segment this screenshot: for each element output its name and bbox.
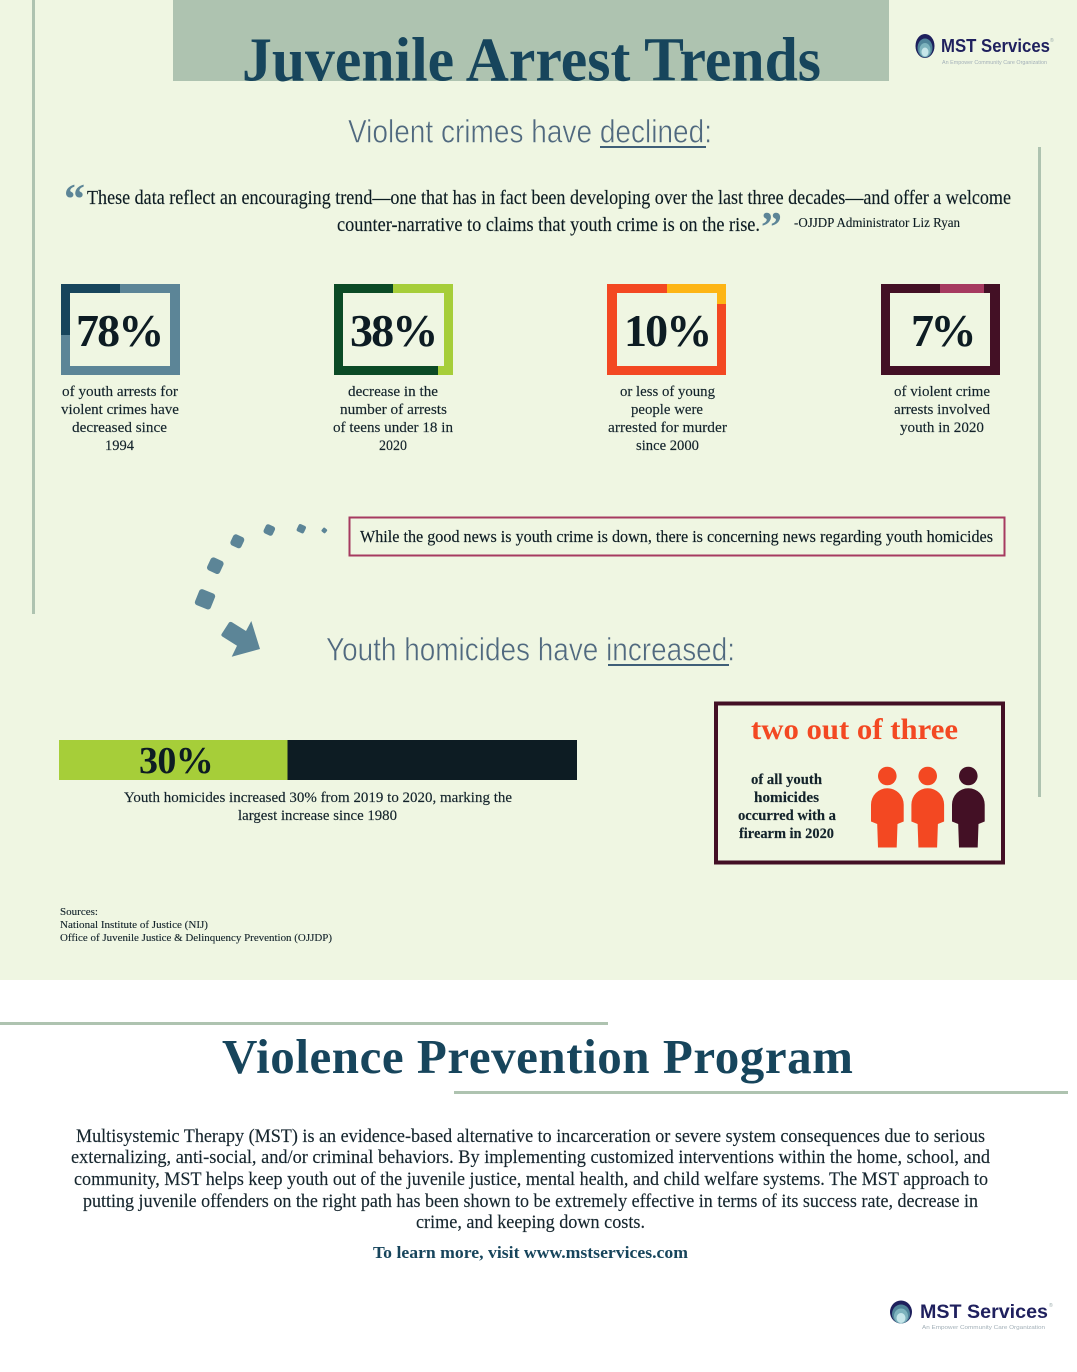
stat: 38%: [333, 284, 453, 454]
text block: MST description: putting juvenile offenders on the right path has been shown to be extremely effective in terms of its success rate, decrease in: [83, 1192, 978, 1212]
panel: two out of three: homicides: [754, 790, 819, 806]
logo: MST Services top: [916, 34, 1054, 66]
quote: “: [64, 177, 85, 223]
panel: two out of three: firearm in 2020: [739, 826, 834, 842]
sources: [60, 906, 332, 944]
logo: MST Services top: ®: [1050, 37, 1054, 44]
text block: MST description: crime, and keeping down costs.: [416, 1213, 645, 1233]
stat: 78%: 78%: [76, 305, 162, 356]
quote: ”: [761, 205, 782, 251]
bar chart: 30%: 30%: [139, 740, 213, 782]
stat: 10%: since 2000: [636, 438, 699, 454]
stat: 38%: 38%: [350, 305, 436, 356]
stat: 38%: 2020: [379, 438, 407, 454]
quote: -OJJDP Administrator Liz Ryan: [794, 215, 960, 230]
logo: MST Services bottom: An Empower Community Care Organization: [922, 1325, 1045, 1331]
icon: person orange 1: [871, 767, 904, 848]
panel: two out of three: of all youth: [751, 772, 823, 788]
quote: counter-narrative to claims that youth crime is on the rise.: [337, 215, 760, 236]
callout: [350, 518, 1004, 556]
stat: 10%: or less of young: [620, 384, 715, 400]
stat: 78%: of youth arrests for: [62, 384, 178, 400]
stat: 10%: 10%: [624, 305, 710, 356]
panel: two out of three: two out of three: [751, 713, 958, 746]
stat: 10%: people were: [631, 402, 703, 418]
stat: 38%: of teens under 18 in: [333, 420, 453, 436]
title band: [173, 0, 889, 81]
sources: Office of Juvenile Justice & Delinquency Prevention (OJJDP): [60, 932, 332, 944]
logo: MST Services bottom: [890, 1300, 1053, 1331]
stat: 10%: arrested for murder: [608, 420, 727, 436]
panel: two out of three: [716, 704, 1003, 862]
bar chart: 30%: largest increase since 1980: [238, 808, 397, 824]
stat: 78%: 1994: [105, 438, 134, 454]
bar chart: 30%: Youth homicides increased 30% from 2019 to 2020, marking the: [124, 790, 512, 806]
stat: 38%: decrease in the: [348, 384, 438, 400]
panel: two out of three: occurred with a: [738, 808, 836, 824]
stat: 7%: arrests involved: [894, 402, 991, 418]
sources: Sources:: [60, 906, 98, 918]
icon: person orange 2: [911, 767, 944, 848]
stat: 7%: [881, 284, 1000, 436]
arrow: dotted curve: [194, 523, 328, 657]
logo: MST Services bottom: ®: [1049, 1302, 1053, 1309]
stat: 78%: decreased since: [72, 420, 167, 436]
title: Juvenile Arrest Trends: [242, 26, 821, 94]
heading: violence prevention program: Violence Prevention Program: [222, 1029, 853, 1084]
heading: youth homicides increased: Youth homicides have increased:: [326, 632, 735, 668]
stat: 38%: number of arrests: [340, 402, 447, 418]
stat: 78%: [61, 284, 180, 454]
stat: 10%: [607, 284, 727, 454]
text block: MST description: community, MST helps keep youth out of the juvenile justice, mental health, and child welfare systems. The MST approach to: [74, 1170, 988, 1190]
sources: National Institute of Justice (NIJ): [60, 919, 208, 931]
logo: MST Services bottom: MST Services: [920, 1302, 1048, 1323]
logo: MST Services top: MST Services: [941, 36, 1050, 56]
heading: violent crimes declined: Violent crimes have declined:: [348, 114, 712, 150]
text block: MST description: Multisystemic Therapy (MST) is an evidence-based alternative to incarceration or severe system consequences due to serious: [76, 1127, 985, 1147]
quote: [64, 177, 1011, 251]
callout: While the good news is youth crime is down, there is concerning news regarding youth homicides: [360, 527, 993, 546]
logo: MST Services top: An Empower Community Care Organization: [942, 60, 1047, 66]
link text: To learn more, visit www.mstservices.com: [373, 1243, 688, 1262]
stat: 7%: 7%: [911, 305, 973, 356]
icon: person dark: [952, 767, 985, 848]
text block: MST description: externalizing, anti-social, and/or criminal behaviors. By implementing customized interventions within the home, school, and: [71, 1148, 991, 1168]
stat: 7%: youth in 2020: [900, 420, 984, 436]
bar chart: 30%: [59, 740, 577, 824]
quote: These data reflect an encouraging trend—one that has in fact been developing over the last three decades—and offer a welcome: [87, 188, 1011, 209]
stat: 7%: of violent crime: [894, 384, 990, 400]
stat: 78%: violent crimes have: [61, 402, 179, 418]
text block: MST description: [71, 1127, 991, 1233]
